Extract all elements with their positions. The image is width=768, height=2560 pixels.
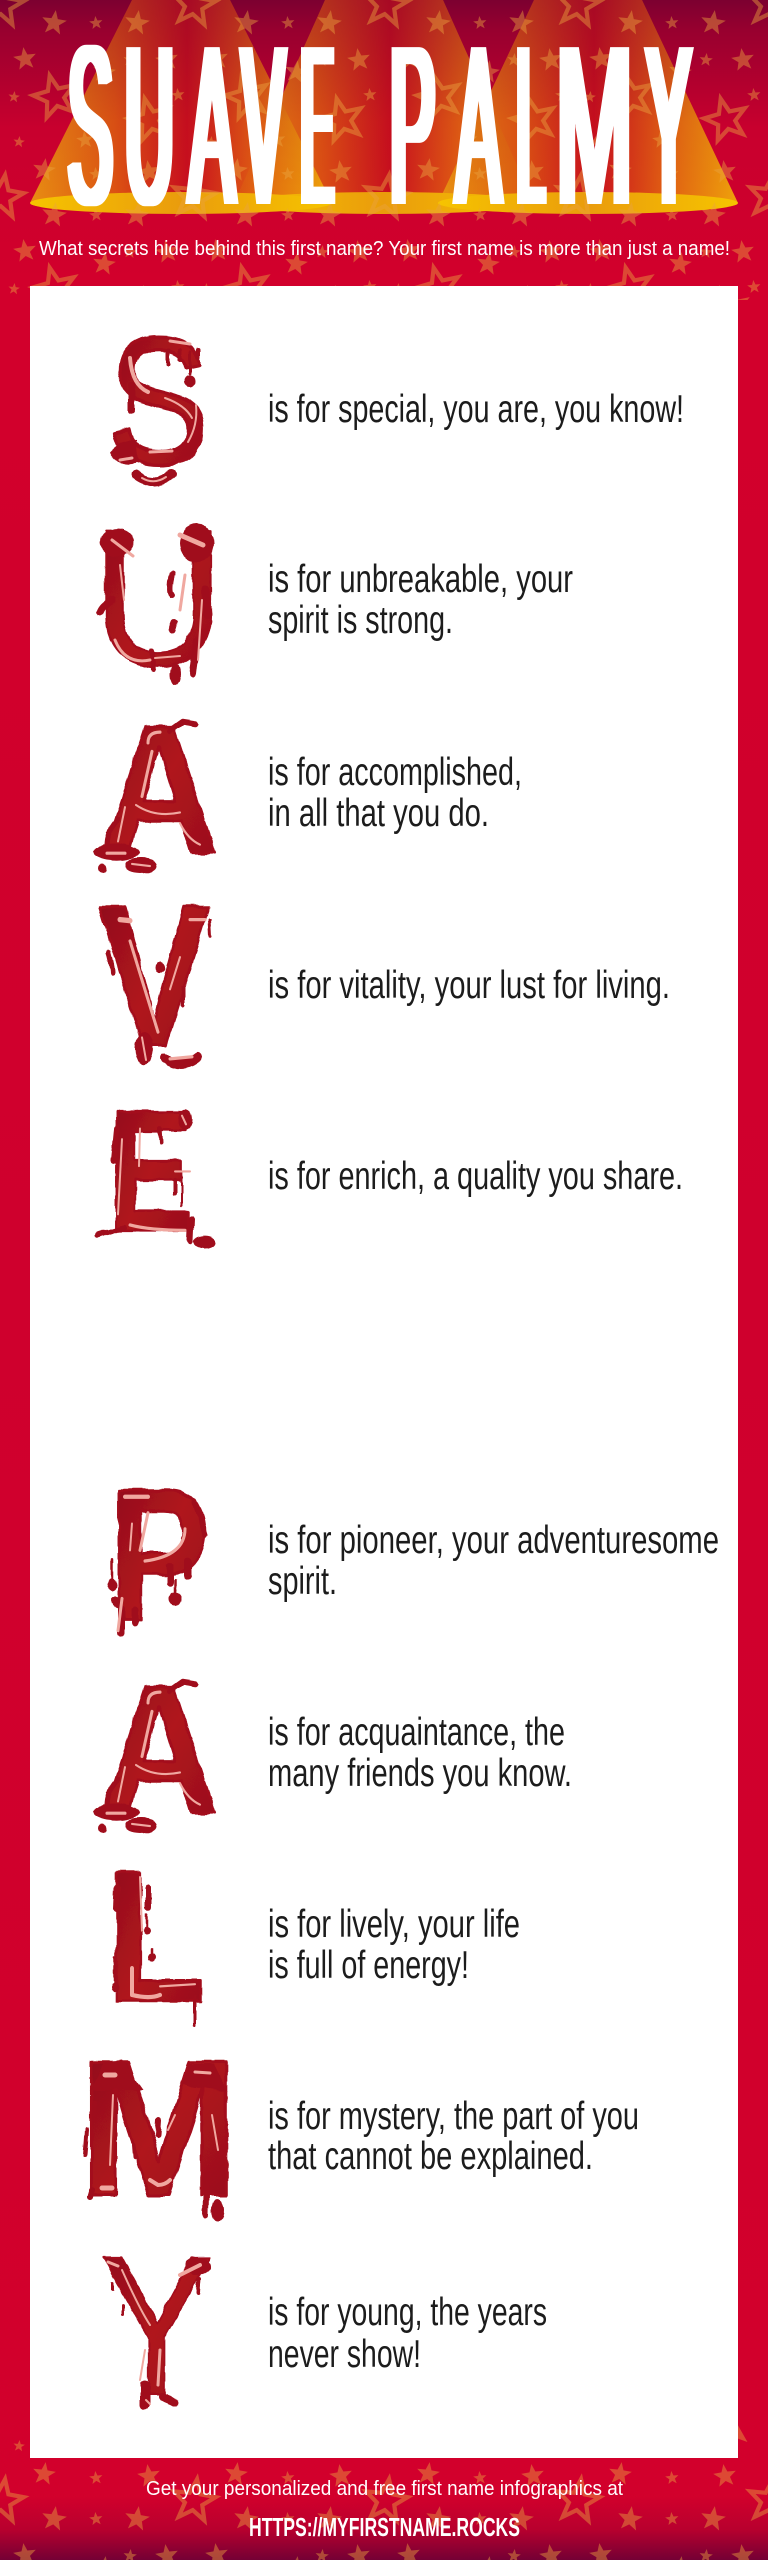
text: P lines [268,1519,719,1603]
footer text: Get your personalized and free first name infographics at [146,2478,623,2500]
spotlight shading [30,0,738,203]
row: L [106,1831,520,2042]
text: A lines: in all that you do. [268,792,489,835]
icon: blood letter A: A [100,688,219,893]
title: U [125,0,173,253]
title: Y [646,0,691,253]
icon: blood letter V: V [99,864,210,1089]
text: L lines: is full of energy! [268,1944,469,1987]
row: S [108,301,684,502]
icon: blood letter P: P [109,1450,210,1661]
spotlight: left [30,0,332,203]
row: Y [100,2215,547,2438]
text: L lines [268,1903,520,1987]
subtitle: What secrets hide behind this first name? Your first name is more than just a name! [39,238,730,260]
stage light pools [30,192,738,214]
star pattern bottom [0,2425,768,2560]
title: M [556,0,633,253]
icon: blood letter S: S [108,301,209,502]
footer url: HTTPS://MYFIRSTNAME.ROCKS [249,2512,520,2542]
spotlight: right [438,0,738,203]
icon: blood letter M: M [78,2020,239,2236]
icon: blood letter L: L [106,1831,206,2042]
row: A [93,688,522,893]
row: P [107,1450,719,1661]
title: A [456,0,501,253]
title: A [189,0,235,253]
text: U lines: is for unbreakable, your [268,558,573,601]
text: A second lines: is for acquaintance, the [268,1711,565,1754]
text: A lines [268,751,522,835]
row: M [78,2020,639,2236]
row: U [92,489,573,707]
panel: white content card [30,286,738,2458]
text: Y lines: never show! [268,2333,421,2376]
title: E [301,0,334,253]
icon: blood letter Y: Y [100,2215,213,2438]
spotlights [30,0,738,214]
text: Y lines [268,2291,547,2376]
spotlight: centre [234,0,534,203]
star pattern top [0,0,768,300]
icon: blood letter A second: A [100,1648,219,1853]
title: S [68,0,113,253]
text: Y lines: is for young, the years [268,2291,547,2334]
text: P lines: spirit. [268,1560,337,1603]
text: A second lines [268,1711,572,1795]
title: L [517,0,545,253]
text: M lines: is for mystery, the part of you [268,2095,639,2138]
icon: blood letter U: U [92,489,225,707]
text: M lines: that cannot be explained. [268,2135,593,2178]
text: U lines: spirit is strong. [268,599,453,642]
icon: blood letter E: E [108,1075,193,1268]
title: P [390,0,436,253]
text: U lines [268,558,573,642]
text: A second lines: many friends you know. [268,1752,572,1795]
row: E [97,1075,683,1268]
text: A lines: is for accomplished, [268,751,522,794]
title: V [242,0,285,253]
text: L lines: is for lively, your life [268,1903,520,1946]
text: M lines [268,2095,639,2178]
row: A second [93,1648,572,1853]
title [67,0,694,253]
row: V [99,864,670,1089]
